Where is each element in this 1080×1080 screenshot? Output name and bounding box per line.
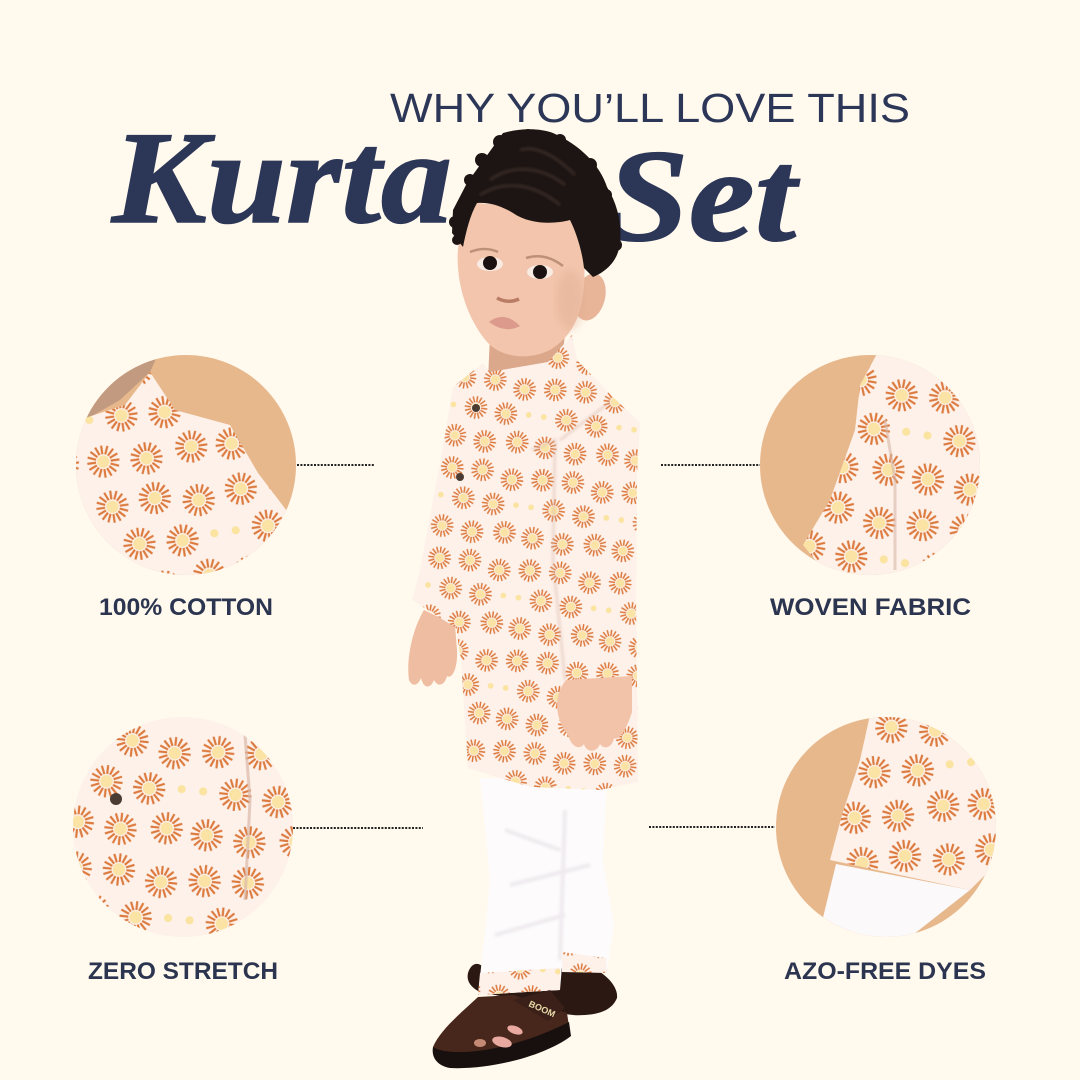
pant cuff far [562, 952, 607, 973]
label: AZO-FREE DYES [784, 958, 986, 985]
label: 100% COTTON [99, 594, 273, 621]
feature: azo-free dyes [649, 712, 1000, 985]
ear [569, 270, 611, 324]
feature: zero stretch [70, 712, 423, 985]
face [458, 203, 584, 356]
connector line [661, 464, 760, 466]
left hand [408, 610, 457, 686]
label: WOVEN FABRIC [770, 594, 971, 621]
eyes [477, 256, 553, 279]
connector line [297, 464, 375, 466]
right hand [557, 676, 632, 751]
heading: Kurta: Kurta [111, 104, 452, 251]
feature: woven fabric [661, 350, 985, 621]
heading: Set: Set [606, 122, 800, 269]
title [111, 85, 910, 269]
connector line [293, 827, 423, 829]
hair highlights [480, 149, 575, 205]
cheek shading [556, 270, 584, 330]
pant fold shading [495, 810, 590, 960]
label: ZERO STRETCH [88, 958, 278, 985]
nose [497, 298, 519, 301]
circle crop: placket [73, 721, 293, 934]
feature: 100% cotton [70, 350, 375, 621]
eyebrows [470, 249, 563, 266]
kurta fold shading [532, 402, 610, 680]
kurta buttons [456, 404, 480, 481]
pant cuff near [478, 968, 560, 995]
circle crop: hem [770, 712, 1000, 945]
neck [488, 335, 565, 380]
mouth [489, 317, 520, 329]
circle crop: sleeve [755, 350, 985, 580]
rear shoe [468, 964, 617, 1015]
circle crop: neckline [70, 350, 300, 580]
connector line [649, 826, 775, 828]
pants [478, 778, 614, 995]
front shoe: BOOM [527, 999, 557, 1019]
infographic canvas [73, 94, 996, 1068]
heading: why you'll love this: WHY YOU’LL LOVE THIS [390, 85, 910, 131]
front shoe [433, 990, 571, 1068]
child wearing kurta set [408, 129, 640, 1068]
hair [449, 129, 622, 277]
kurta [412, 335, 640, 790]
